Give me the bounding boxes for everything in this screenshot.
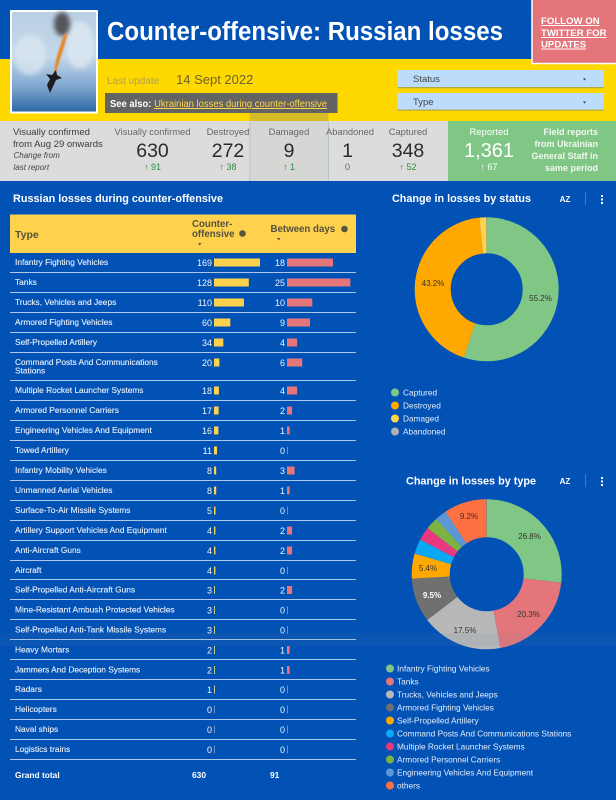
status donut percentages: 43.2% [422,279,444,288]
row: Towed Artillery [15,445,288,456]
scorecards panel: visually confirmed: Visually confirmed [13,127,90,138]
row: Armored Fighting Vehicles: Armored Fighting Vehicles [15,317,112,327]
row: Multiple Rocket Launcher Systems: 18 [202,386,212,396]
field reports note: General Staff in [531,151,598,161]
row: Naval ships [15,724,288,735]
row: Aircraft: 0 [280,566,285,576]
field reports note: same period [545,163,598,173]
last update date: Last update [107,76,160,87]
row: Self-Propelled Artillery: Self-Propelled Artillery [15,337,98,347]
scorecard: captured: 348 [392,140,424,162]
table row lines [10,272,356,760]
row: Towed Artillery: 11 [203,446,212,456]
row: Logistics trains: 0 [280,745,285,755]
row: Unmanned Aerial Vehicles: Unmanned Aerial Vehicles [15,485,112,495]
donut chart: status [433,235,541,343]
table header: Type [15,229,39,241]
table header [10,214,356,253]
table header: offensive [192,229,235,240]
row: Engineering Vehicles And Equipment [15,425,290,436]
row: Multiple Rocket Launcher Systems: 4 [280,386,285,396]
field reports note: from Ukrainian [534,139,598,149]
legend: type: Engineering Vehicles And Equipment [397,768,534,778]
status donut percentages: 55.2% [529,294,552,303]
row: Armored Personnel Carriers: 2 [280,406,285,416]
row: Unmanned Aerial Vehicles: 8 [207,486,212,496]
scorecard: damaged: 9 [284,140,294,162]
row: Multiple Rocket Launcher Systems [15,385,297,396]
scorecard: abandoned [326,126,374,172]
row: Self-Propelled Anti-Tank Missile Systems: 3 [207,626,212,636]
row: Surface-To-Air Missile Systems: 0 [280,506,285,516]
chart heading: type: Change in losses by type [406,476,536,488]
scorecard: visually confirmed total: ↑ 91 [144,162,161,172]
sort and menu icons: status chart [560,192,603,205]
row: Aircraft [15,565,288,576]
row: Helicopters: Helicopters [15,704,57,714]
legend: type: Armored Fighting Vehicles [397,702,494,712]
row: Self-Propelled Anti-Aircraft Guns: 3 [207,586,212,596]
row: Anti-Aircraft Guns [15,545,292,556]
twitter follow button [532,0,616,64]
row: Jammers And Deception Systems: Jammers And Deception Systems [15,664,140,674]
scorecard: reported: ↑ 67 [480,162,498,172]
donut chart: type [431,518,543,630]
row: Helicopters: 0 [207,705,212,715]
field reports note: Field reports [543,127,598,137]
scorecard: damaged [269,126,309,172]
grand total row: 91 [270,770,280,780]
row: Infantry Fighting Vehicles [15,257,333,268]
type donut percentages [419,512,541,635]
header band: yellow [0,59,616,121]
row: Trucks, Vehicles and Jeeps: Trucks, Vehicles and Jeeps [15,297,116,307]
scorecard: abandoned: Abandoned [326,126,374,137]
row: Helicopters: 0 [280,705,285,715]
twitter follow button: FOLLOW ON [541,16,600,27]
row: Infantry Mobility Vehicles: 3 [280,466,285,476]
row: Command Posts And Communications Stations: 6 [280,358,285,368]
grand total row: 630 [192,770,206,780]
legend: status: Damaged [403,414,439,424]
row: Infantry Fighting Vehicles: Infantry Fighting Vehicles [15,257,108,267]
row: Self-Propelled Artillery [15,337,297,348]
grand total row [15,770,280,780]
row: Armored Personnel Carriers: Armored Personnel Carriers [15,405,119,415]
row: Trucks, Vehicles and Jeeps: 110 [198,298,212,308]
type donut percentages: 5.4% [419,564,437,573]
row: Armored Fighting Vehicles [15,317,310,328]
row: Engineering Vehicles And Equipment: 1 [280,426,285,436]
row: Infantry Mobility Vehicles: 8 [207,466,212,476]
row: Radars: 1 [207,685,212,695]
row: Jammers And Deception Systems: 2 [207,666,212,676]
photo: burning jet falling [10,10,98,114]
row: Armored Fighting Vehicles: 60 [202,318,212,328]
legend: type: Tanks [397,676,419,686]
type dropdown [398,93,604,111]
row: Aircraft: 4 [207,566,212,576]
row: Self-Propelled Anti-Tank Missile Systems [15,624,288,636]
row: Tanks [15,277,350,288]
row: Tanks: 128 [197,278,212,288]
row: Infantry Mobility Vehicles: Infantry Mobility Vehicles [15,465,107,475]
row: Command Posts And Communications Stations: Command Posts And Communications [15,357,158,367]
legend: status: Destroyed [403,400,441,410]
status dropdown: Status [413,74,440,85]
row: Command Posts And Communications Stations: Stations [15,366,45,376]
type dropdown: Type [413,97,434,108]
type donut percentages: 20.3% [517,610,540,619]
row: Heavy Mortars: 2 [207,646,212,656]
scorecard: visually confirmed total: Visually confirmed [115,126,190,137]
row: Jammers And Deception Systems [15,664,290,676]
row: Logistics trains: 0 [207,745,212,755]
row: Self-Propelled Anti-Aircraft Guns: 2 [280,586,285,596]
row: Armored Personnel Carriers [15,405,292,416]
sort and menu icons: type chart [560,474,603,487]
row: Radars: 0 [280,685,285,695]
scorecard: destroyed: 272 [212,140,244,162]
row: Trucks, Vehicles and Jeeps: 10 [275,298,285,308]
see also link [105,93,338,113]
scorecards panel: visually confirmed: last report [14,163,50,172]
row: Engineering Vehicles And Equipment: Engineering Vehicles And Equipment [15,425,153,435]
row: Naval ships: 0 [280,725,285,735]
legend: status: Captured [403,388,438,398]
scorecard: captured [389,126,427,172]
row: Helicopters [15,704,288,715]
legend: type: Command Posts And Communications Stations [397,728,571,738]
row: Aircraft: Aircraft [15,565,42,575]
page title: Counter-offensive: Russian losses [107,18,503,46]
scorecard: visually confirmed total [115,126,190,172]
row: Surface-To-Air Missile Systems: Surface-To-Air Missile Systems [15,505,130,515]
scorecards panel: visually confirmed: from Aug 29 onwards [13,139,103,150]
legend: type: others [397,780,420,790]
row: Self-Propelled Anti-Tank Missile Systems: Self-Propelled Anti-Tank Missile Systems [15,624,166,634]
row: Radars [15,684,288,695]
legend: type: Multiple Rocket Launcher Systems [397,742,525,752]
twitter follow button: UPDATES [541,40,587,50]
scorecard: destroyed: Destroyed [207,126,249,137]
row: Self-Propelled Artillery: 4 [280,338,285,348]
scorecard: captured: Captured [389,126,427,137]
legend: type: Armored Personnel Carriers [397,754,500,764]
grand total row: Grand total [15,770,60,780]
last update date: 14 Sept 2022 [176,72,253,87]
legend: type: Trucks, Vehicles and Jeeps [397,690,498,700]
sort and menu icons: type chart: AZ [560,477,570,486]
row: Armored Fighting Vehicles: 9 [280,318,285,328]
row: Anti-Aircraft Guns: 2 [280,546,285,556]
row: Logistics trains: Logistics trains [15,744,70,754]
legend: type: Infantry Fighting Vehicles [397,664,490,674]
legend: type: Self-Propelled Artillery [397,716,479,726]
table heading: Russian losses during counter-offensive [13,193,223,205]
row: Naval ships: Naval ships [15,724,58,734]
row: Artillery Support Vehicles And Equipment: 4 [207,526,212,536]
row: Command Posts And Communications Stations: 20 [202,358,212,368]
twitter follow button: TWITTER FOR [541,28,607,39]
row: Tanks: Tanks [15,277,37,287]
row: Infantry Fighting Vehicles: 18 [275,258,285,268]
scorecard: reported: 1,361 [464,140,514,162]
row: Tanks: 25 [275,278,285,288]
row: Surface-To-Air Missile Systems: 5 [207,506,212,516]
row: Radars: Radars [15,684,42,694]
legend: status: Abandoned [403,426,446,436]
row: Towed Artillery: Towed Artillery [15,445,70,455]
row: Self-Propelled Anti-Aircraft Guns: Self-Propelled Anti-Aircraft Guns [15,584,135,594]
row: Artillery Support Vehicles And Equipment: Artillery Support Vehicles And Equipment [15,525,167,535]
row: Mine-Resistant Ambush Protected Vehicles [15,604,288,616]
scorecards panel: visually confirmed: Change from [14,151,60,160]
row: Trucks, Vehicles and Jeeps [15,297,312,308]
row: Heavy Mortars: Heavy Mortars [15,644,69,654]
status donut percentages [422,279,552,303]
last update date [107,72,253,87]
type donut percentages: 26.8% [518,532,541,541]
scorecard: damaged: ↑ 1 [283,162,295,172]
scorecards panel: visually confirmed [0,113,448,181]
row: Mine-Resistant Ambush Protected Vehicles: 3 [207,606,212,616]
row: Heavy Mortars [15,644,290,656]
row: Anti-Aircraft Guns: 4 [207,546,212,556]
row: Naval ships: 0 [207,725,212,735]
sort and menu icons: status chart: AZ [560,195,570,204]
type donut percentages: 17.5% [454,626,476,635]
see also link: See also: Ukrainian losses during counter-offensive [110,99,328,110]
row: Mine-Resistant Ambush Protected Vehicles: Mine-Resistant Ambush Protected Vehicles [15,604,175,614]
row: Mine-Resistant Ambush Protected Vehicles: 0 [280,606,285,616]
scorecard: damaged: Damaged [269,126,309,137]
scorecard: reported [448,121,616,181]
row: Self-Propelled Anti-Tank Missile Systems: 0 [280,626,285,636]
row: Unmanned Aerial Vehicles [15,485,290,496]
row: Unmanned Aerial Vehicles: 1 [280,486,285,496]
scorecard: captured: ↑ 52 [399,162,417,172]
scorecard: reported: Reported [469,127,509,138]
legend: type [386,664,571,790]
scorecard: abandoned: 1 [342,140,353,162]
scorecard: abandoned: 0 [345,161,350,172]
row: Infantry Mobility Vehicles [15,465,295,476]
table header: Between days [270,224,335,235]
row: Towed Artillery: 0 [280,446,285,456]
row: Infantry Fighting Vehicles: 169 [197,258,212,268]
row: Multiple Rocket Launcher Systems: Multiple Rocket Launcher Systems [15,385,143,395]
row: Anti-Aircraft Guns: Anti-Aircraft Guns [15,545,81,555]
scorecard: visually confirmed total: 630 [136,140,169,162]
chart heading: status: Change in losses by status [392,193,531,205]
type donut percentages: 9.2% [460,512,478,521]
status dropdown [398,70,604,88]
row: Artillery Support Vehicles And Equipment [15,525,292,536]
row: Artillery Support Vehicles And Equipment: 2 [280,526,285,536]
row: Self-Propelled Anti-Aircraft Guns [15,584,292,596]
type donut percentages: 9.5% [423,591,441,600]
legend: status [391,388,446,436]
table header: Counter- [192,219,232,230]
row: Self-Propelled Artillery: 34 [202,338,212,348]
scorecard: destroyed: ↑ 38 [219,162,237,172]
row: Heavy Mortars: 1 [280,646,285,656]
row: Jammers And Deception Systems: 1 [280,666,285,676]
row: Engineering Vehicles And Equipment: 16 [202,426,212,436]
row: Armored Personnel Carriers: 17 [202,406,212,416]
scorecard: destroyed [207,126,249,172]
row: Surface-To-Air Missile Systems [15,505,288,516]
row: Command Posts And Communications Stations [15,357,302,376]
row: Logistics trains [15,744,288,755]
